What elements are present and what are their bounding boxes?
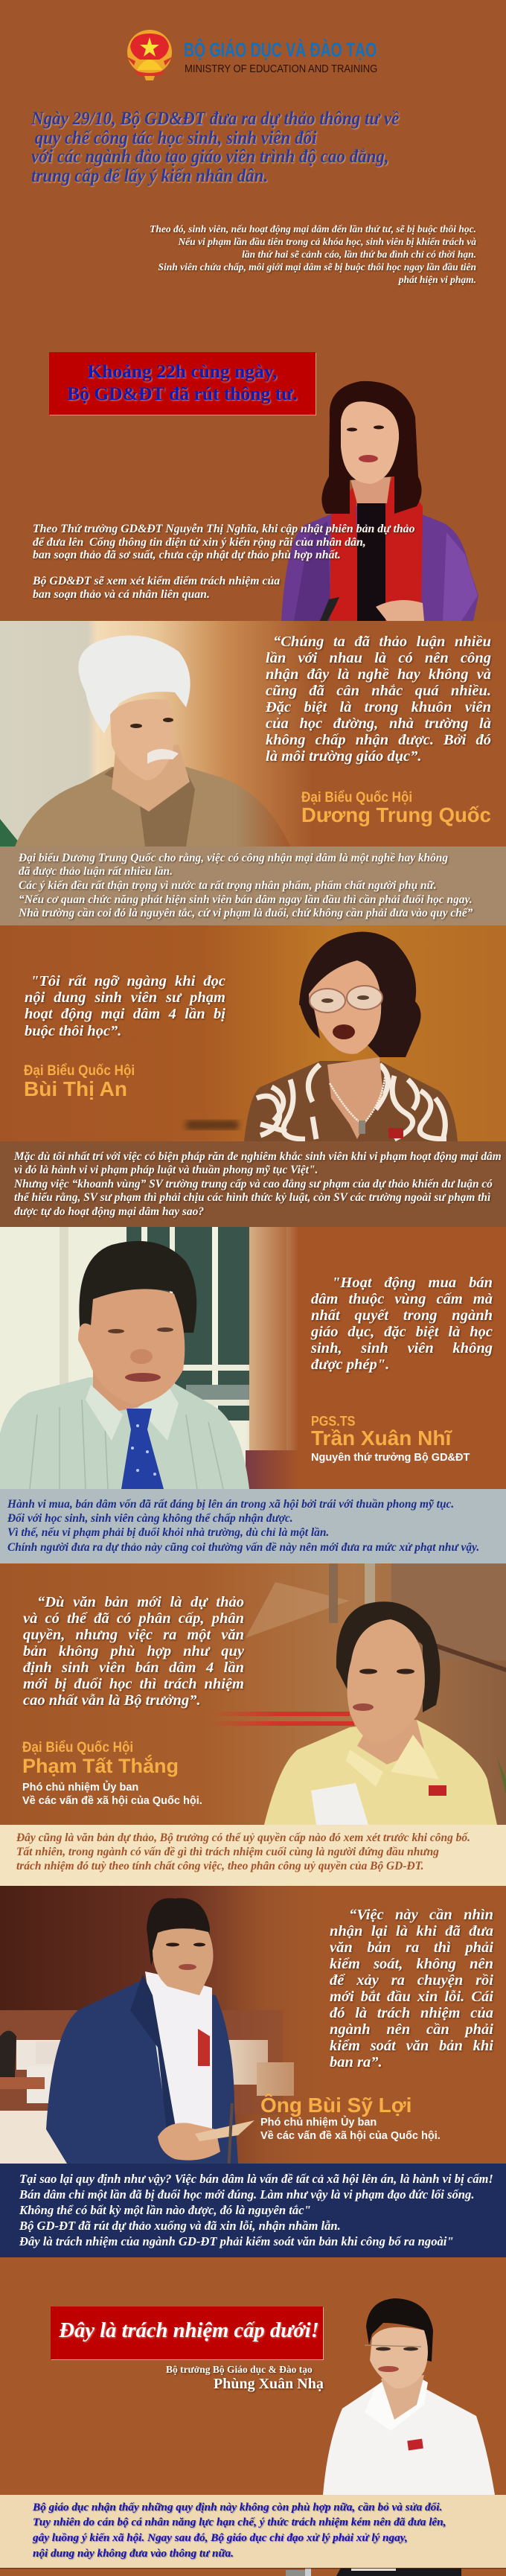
speaker name: Bùi Thị An xyxy=(24,1063,135,1100)
speaker role: Về các vấn đề xã hội của Quốc hội. xyxy=(260,2130,441,2142)
intro heading: với các ngành đào tạo giáo viên trình độ cao đẳng, xyxy=(31,147,389,167)
section background: intro xyxy=(0,0,506,621)
caption text: Không thể có bất kỳ một lần nào được, đó là nguyên tắc" xyxy=(19,2202,311,2217)
statement text: Nguyễn Thị Nghĩa: ban soạn thảo đã sơ suất, chưa cập nhật dự thảo phù hợp nhất. xyxy=(33,549,341,561)
quote: Bùi Thị An: hoạt động mại dâm 4 lần bị xyxy=(25,1006,225,1022)
portrait: Nguyễn Thị Nghĩa xyxy=(281,381,478,621)
quote: Bùi Sỹ Lợi: nhận lại là khi đã đưa xyxy=(330,1923,493,1939)
caption text xyxy=(7,1498,479,1554)
statement text: Nguyễn Thị Nghĩa: ban soạn thảo và cá nhân liên quan. xyxy=(33,588,210,601)
panel: Dương Trung Quốc xyxy=(0,621,506,847)
quote: Bùi Sỹ Lợi: ngành nên cần phải xyxy=(330,2021,493,2038)
caption text: Tất nhiên, trong ngành có vấn đề gì thì trách nhiệm cuối cùng là người đứng đầu nhưng xyxy=(16,1846,439,1858)
quote: Bùi Sỹ Lợi: ban ra”. xyxy=(330,2054,382,2070)
portrait: Phùng Xuân Nhạ xyxy=(323,2298,495,2495)
quote: Phạm Tất Thắng: cao nhất vẫn là Bộ trưởng”. xyxy=(23,1692,201,1709)
caption text: “Nếu cơ quan chức năng phát hiện sinh viên bán dâm ngay lần đầu thì cần phải đuổi học ngay. xyxy=(19,893,473,906)
caption band: Phùng Xuân Nhạ xyxy=(0,2495,506,2568)
speaker role xyxy=(22,1781,202,1807)
speaker role: minister: Bộ trưởng Bộ Giáo dục & Đào tạo xyxy=(166,2364,313,2375)
caption text: Đây là trách nhiệm của ngành GD-ĐT phải kiểm soát văn bản khi công bố ra ngoài" xyxy=(19,2234,454,2248)
caption text: Vì thế, nếu vi phạm phải bị đuổi khỏi nhà trường, dù chỉ là một lần. xyxy=(7,1526,329,1539)
speaker full name: Phạm Tất Thắng xyxy=(22,1755,179,1777)
speaker role xyxy=(260,2116,441,2142)
caption text: vì đó là hành vi vi phạm pháp luật và thuần phong mỹ tục Việt". xyxy=(14,1164,318,1176)
quote: Phạm Tất Thắng: mới bị đuổi học thì trách nhiệm xyxy=(23,1676,244,1692)
quote: Dương Trung Quốc: của học đường, nhà trường là xyxy=(266,715,491,732)
quote: Bùi Sỹ Lợi: văn bản ra thì phải xyxy=(330,1939,493,1956)
statement text: Nguyễn Thị Nghĩa: để đưa lên Cổng thông tin điện tử xin ý kiến rộng rãi của nhân dân, xyxy=(33,536,366,549)
intro detail text xyxy=(150,223,478,287)
caption text: nội dung này không đưa vào thông tư nữa. xyxy=(33,2547,234,2560)
quote: Bùi Thị An: buộc thôi học”. xyxy=(25,1023,121,1039)
quote: Bùi Sỹ Lợi: kiểm soát văn bản khi xyxy=(330,2038,493,2054)
caption text: đã được thảo luận rất nhiều lần. xyxy=(19,865,173,878)
caption band: Dương Trung Quốc xyxy=(0,847,506,925)
caption text: Chính người đưa ra dự thảo này cũng coi thường vấn đề này nên mới đưa ra mức xử phạt như vậy. xyxy=(7,1541,479,1554)
intro heading: Ngày 29/10, Bộ GD&ĐT đưa ra dự thảo thông tư về xyxy=(31,109,399,129)
intro detail text: phát hiện vi phạm. xyxy=(399,274,476,285)
intro detail text: Theo đó, sinh viên, nếu hoạt động mại dâm đến lần thứ tư, sẽ bị buộc thôi học. xyxy=(150,223,476,234)
quote: Dương Trung Quốc: lần với nhau là có nên công xyxy=(266,650,491,666)
quote: Bùi Sỹ Lợi: “Việc này cần nhìn xyxy=(349,1907,493,1923)
quote: Phạm Tất Thắng: định sinh viên bán dâm 4 lần xyxy=(23,1660,244,1676)
caption text: Hành vi mua, bán dâm vốn đã rất đáng bị lên án trong xã hội bởi trái với thuần phong mỹ tục. xyxy=(7,1498,454,1510)
panel: Bùi Sỹ Lợi xyxy=(0,1886,506,2164)
quote: Bùi Sỹ Lợi xyxy=(330,1907,495,2070)
caption text xyxy=(16,1831,470,1872)
speaker full name: Dương Trung Quốc xyxy=(301,803,491,826)
quote: Bùi Thị An: nội dung sinh viên sư phạm xyxy=(25,989,225,1006)
caption text: Bộ giáo dục nhận thấy những quy định này không còn phù hợp nữa, cần bỏ và sửa đổi. xyxy=(33,2500,442,2513)
caption text: Đây cũng là văn bản dự thảo, Bộ trưởng có thể uỷ quyền cấp nào đó xem xét trước khi công bố. xyxy=(16,1831,470,1843)
speaker full name: Bùi Thị An xyxy=(24,1077,127,1100)
quote: Phạm Tất Thắng: và có thể đã có phân cấp, phân xyxy=(23,1610,244,1627)
photo: Bùi Sỹ Lợi xyxy=(0,1886,294,2164)
intro heading: trung cấp để lấy ý kiến nhân dân. xyxy=(31,166,268,186)
photo: Trần Xuân Nhĩ xyxy=(0,1227,297,1489)
quote: Dương Trung Quốc: là môi trường giáo dục”. xyxy=(266,748,422,765)
quote: Bùi Sỹ Lợi: kiểm soát, không nên xyxy=(330,1956,493,1972)
caption text: gây luồng ý kiến xã hội. Ngay sau đó, Bộ giáo dục chỉ đạo xử lý phải xử lý ngay, xyxy=(33,2531,408,2544)
caption text: được tự do hoạt động mại dâm hay sao? xyxy=(14,1205,204,1218)
quote: Bùi Sỹ Lợi: để xảy ra chuyện rồi xyxy=(330,1972,493,1989)
caption text: trách nhiệm đó tuỳ theo tính chất công việc, theo phân công uỷ quyền của Bộ GD-ĐT. xyxy=(16,1860,424,1872)
quote: Phạm Tất Thắng xyxy=(23,1594,246,1710)
caption text xyxy=(13,1150,502,1220)
speaker role: Nguyên thứ trưởng Bộ GD&ĐT xyxy=(311,1452,470,1464)
quote: Phạm Tất Thắng: “Dù văn bản mới là dự thảo xyxy=(37,1594,244,1610)
caption text: Các ý kiến đều rất thận trọng vì nước ta rất trọng nhân phẩm, phẩm chất người phụ nữ. xyxy=(19,879,437,892)
callout text: Khoảng 22h cùng ngày, xyxy=(87,360,278,382)
callout: responsibility xyxy=(51,2306,323,2359)
speaker full name: Ông Bùi Sỹ Lợi xyxy=(260,2094,411,2117)
caption text: Tại sao lại quy định như vậy? Việc bán dâm là vấn đề tất cả xã hội lên án, là hành vi bị cấm! xyxy=(19,2171,493,2186)
speaker name: Bùi Sỹ Lợi xyxy=(260,2094,441,2142)
photo: Phạm Tất Thắng xyxy=(208,1563,506,1825)
callout text: Bộ GD&ĐT đã rút thông tư. xyxy=(67,383,298,404)
caption text xyxy=(19,2171,493,2248)
caption text xyxy=(18,852,475,921)
quote: Dương Trung Quốc: không chấp nhận được. Bởi đó xyxy=(266,732,491,748)
caption text: Mặc dù tôi nhất trí với việc có biện pháp răn đe nghiêm khắc sinh viên khi vi phạm hoạt động mại dâm xyxy=(14,1150,502,1163)
intro heading: quy chế công tác học sinh, sinh viên đối xyxy=(35,128,316,148)
logo subtitle: MINISTRY OF EDUCATION AND TRAINING xyxy=(185,63,377,75)
caption text: thể hiểu rằng, SV sư phạm thì phải chịu các hình thức kỷ luật, còn SV các trường ngoài sư phạm thì xyxy=(14,1191,490,1204)
logo title: BỘ GIÁO DỤC VÀ ĐÀO TẠO xyxy=(184,39,377,61)
speaker title: PGS.TS xyxy=(311,1414,355,1429)
speaker name: Dương Trung Quốc xyxy=(301,790,491,826)
quote: Trần Xuân Nhĩ xyxy=(311,1275,494,1374)
panel: Bùi Thị An xyxy=(0,925,506,1141)
icon: national emblem xyxy=(126,30,173,80)
speaker role: Phó chủ nhiệm Ủy ban xyxy=(22,1782,138,1794)
caption text: Bán dâm chỉ một lần đã bị đuổi học mới đúng. Làm như vậy là vi phạm đạo đức lối sống. xyxy=(19,2187,474,2201)
speaker title: Đại Biểu Quốc Hội xyxy=(22,1740,133,1756)
quote: Dương Trung Quốc: cũng đã cân nhắc quá nhiều. xyxy=(266,683,491,699)
speaker name: minister: Phùng Xuân Nhạ xyxy=(214,2376,324,2392)
quote: Dương Trung Quốc: “Chúng ta đã thảo luận nhiều xyxy=(273,634,491,650)
speaker full name: Trần Xuân Nhĩ xyxy=(311,1426,451,1450)
panel: Phạm Tất Thắng xyxy=(0,1563,506,1825)
trousers below caption xyxy=(286,2568,461,2576)
caption text: Nhà trường cần coi đó là nguyên tắc, cứ vi phạm là đuổi, chứ không cần phải đưa vào quy chế” xyxy=(19,907,473,919)
statement text: Nguyễn Thị Nghĩa: Theo Thứ trưởng GD&ĐT Nguyễn Thị Nghĩa, khi cập nhật phiên bản dự thảo xyxy=(33,523,414,535)
speaker name: Trần Xuân Nhĩ xyxy=(311,1414,470,1464)
intro detail text: Nếu vi phạm lần đầu tiên trong cả khóa học, sinh viên bị khiển trách và xyxy=(178,236,476,247)
quote: Trần Xuân Nhĩ: giáo dục, đặc biệt là học xyxy=(311,1324,493,1340)
statement text: Nguyễn Thị Nghĩa: Bộ GD&ĐT sẽ xem xét kiểm điểm trách nhiệm của xyxy=(33,575,280,587)
photo: Dương Trung Quốc xyxy=(0,621,298,847)
caption text: Đối với học sinh, sinh viên càng không thể chấp nhận được. xyxy=(7,1512,293,1525)
intro heading xyxy=(31,109,400,188)
speaker role: Phó chủ nhiệm Ủy ban xyxy=(260,2117,377,2129)
speaker title: Đại Biểu Quốc Hội xyxy=(24,1063,135,1079)
quote: Bùi Thị An xyxy=(25,973,227,1039)
quote: Bùi Thị An: "Tôi rất ngỡ ngàng khi đọc xyxy=(31,973,225,989)
quote: Phạm Tất Thắng: quyền, nhưng việc ra một văn xyxy=(23,1627,244,1643)
caption band: Bùi Thị An xyxy=(0,1141,506,1227)
callout text xyxy=(67,360,298,406)
quote: Trần Xuân Nhĩ: nhất quyết trong ngành xyxy=(311,1307,493,1324)
logo: Ministry of Education and Training xyxy=(126,30,377,80)
speaker title: Đại Biểu Quốc Hội xyxy=(301,790,412,806)
caption text: Bộ GD-ĐT đã rút dự thảo xuống và đã xin lỗi, nhận nhầm lẫn. xyxy=(19,2219,341,2232)
caption band: Phạm Tất Thắng xyxy=(0,1825,506,1886)
intro detail text: Sinh viên chứa chấp, môi giới mại dâm sẽ bị buộc thôi học ngay lần đầu tiên xyxy=(158,261,476,272)
caption text: Đại biểu Dương Trung Quốc cho rằng, việc có công nhận mại dâm là một nghề hay không xyxy=(19,852,448,864)
quote: Bùi Sỹ Lợi: đó là trách nhiệm của xyxy=(330,2005,493,2021)
panel: Trần Xuân Nhĩ xyxy=(0,1227,506,1489)
callout text: Đây là trách nhiệm cấp dưới! xyxy=(59,2319,319,2342)
quote: Bùi Sỹ Lợi: mới bắt đầu xin lỗi. Cái xyxy=(330,1989,493,2005)
statement text: Nguyễn Thị Nghĩa xyxy=(33,523,417,602)
caption band: Trần Xuân Nhĩ xyxy=(0,1489,506,1563)
caption band: Bùi Sỹ Lợi xyxy=(0,2164,506,2257)
panel: Phùng Xuân Nhạ xyxy=(0,2257,506,2576)
quote: Trần Xuân Nhĩ: được phép". xyxy=(311,1356,389,1373)
quote: Dương Trung Quốc: Đặc biệt là trong khuôn viên xyxy=(266,699,491,715)
caption text: Nhưng việc “khoanh vùng” SV trường trung cấp và cao đẳng sư phạm của dự thảo khiến dư luận có xyxy=(14,1178,493,1190)
quote: Trần Xuân Nhĩ: "Hoạt động mua bán xyxy=(332,1275,493,1291)
speaker name: Phạm Tất Thắng xyxy=(22,1740,202,1807)
speaker role: Về các vấn đề xã hội của Quốc hội. xyxy=(22,1795,202,1807)
quote: Trần Xuân Nhĩ: sinh, sinh viên không xyxy=(311,1340,493,1356)
intro detail text: lần thứ hai sẽ cảnh cáo, lần thứ ba đình chỉ có thời hạn. xyxy=(242,249,476,260)
callout: withdrawn circular xyxy=(49,352,316,415)
quote: Dương Trung Quốc xyxy=(265,634,493,766)
caption text xyxy=(33,2500,446,2560)
quote: Phạm Tất Thắng: bản không phù hợp như quy xyxy=(23,1643,244,1660)
photo: Bùi Thị An xyxy=(183,925,506,1141)
caption text: Tuy nhiên do cán bộ cá nhân năng lực hạn chế, ý thức trách nhiệm kém nên đã đưa lên, xyxy=(33,2516,446,2528)
quote: Dương Trung Quốc: nhận đây là nghề hay không và xyxy=(266,666,491,683)
quote: Trần Xuân Nhĩ: dâm thuộc vùng cấm mà xyxy=(311,1291,493,1307)
